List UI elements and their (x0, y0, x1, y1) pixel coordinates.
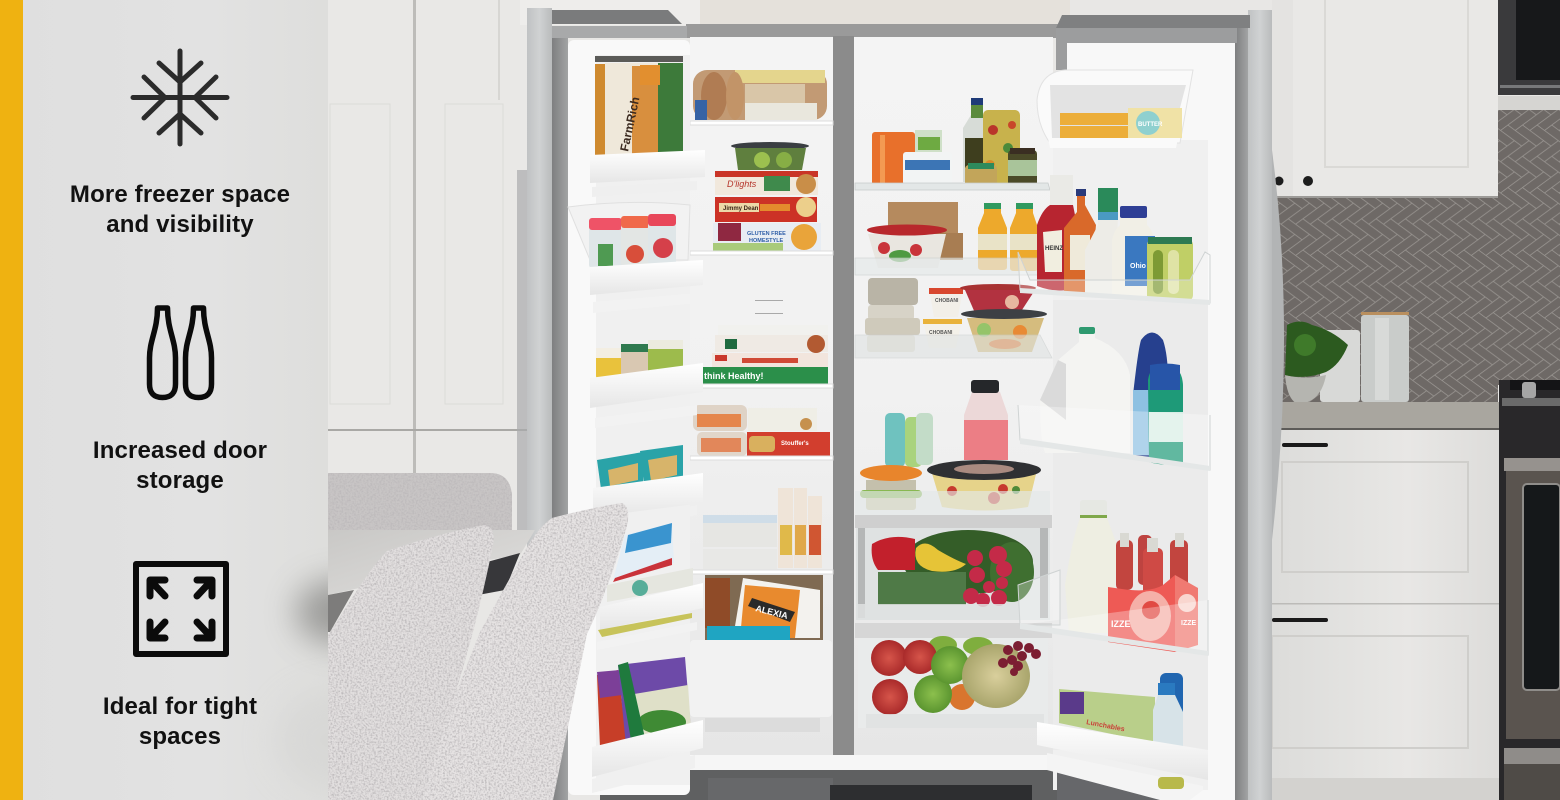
orange juice bottles (978, 203, 1038, 271)
frozen bags on door (607, 523, 693, 602)
freezer shelf 4 (690, 456, 833, 460)
vegetable bags (597, 657, 691, 748)
milk bottle (1065, 500, 1117, 633)
refrigerator cabinet (600, 24, 1060, 800)
dairy compartment (1037, 70, 1193, 148)
Izze carton: IZZE (1111, 619, 1130, 629)
freezer shelf 2 (690, 251, 833, 255)
right refrigerator door (1018, 10, 1284, 800)
icon: two bottles (150, 308, 212, 398)
back chair (328, 473, 512, 530)
radishes (963, 546, 1012, 607)
pasta bowl (927, 460, 1041, 510)
herringbone backsplash (1272, 198, 1498, 403)
gluten free box: GLUTEN FREE (747, 231, 786, 237)
gluten free box (713, 223, 821, 252)
counter canisters and plant (1285, 312, 1409, 403)
freezer drawer contents: ALEXIA (755, 603, 789, 621)
door shelf 6 (592, 720, 703, 777)
covered berry container (731, 142, 809, 170)
D'lights box (715, 171, 818, 195)
Farm Rich box: FarmRich (617, 96, 642, 153)
freezer shelf 3 (690, 384, 833, 388)
door shelf 4 (593, 473, 703, 517)
silver door edge (1248, 10, 1272, 800)
red bell pepper (872, 537, 915, 570)
door curve (1272, 150, 1284, 540)
dining table and chairs (328, 473, 628, 800)
D'lights box: D'lights (727, 179, 757, 189)
heading: door storage line 2: storage (136, 467, 224, 494)
door bottom shelf (1037, 722, 1208, 780)
mayonnaise jar: Ohio (1130, 263, 1146, 270)
cardboard takeout boxes (888, 202, 963, 260)
beige wall above fridge (700, 0, 1070, 30)
upper crisper drawer (855, 515, 1052, 620)
kids drink bottles (1153, 673, 1183, 752)
tall entree boxes (778, 488, 822, 568)
ketchup bottle (1037, 175, 1075, 291)
freezer shelf 5 (690, 570, 833, 574)
upper right cabinets (1272, 0, 1498, 198)
salad bowl (961, 309, 1047, 352)
stove (1499, 380, 1560, 800)
hinge (1056, 15, 1250, 28)
milk jug (1040, 327, 1130, 453)
creamer bottles (1133, 332, 1183, 464)
pasta jar (983, 110, 1020, 185)
fruit (871, 636, 1041, 715)
bread on freezer shelf 1 (693, 70, 827, 120)
left freezer door (517, 8, 705, 800)
strawberry container (960, 284, 1036, 313)
ketchup bottle: HEINZ (1045, 246, 1063, 252)
Jimmy Dean box (715, 197, 817, 222)
refrigerator compartment contents (855, 98, 1052, 728)
small jars (965, 148, 1037, 188)
Jimmy Dean box: Jimmy Dean (723, 206, 759, 212)
hinge (552, 10, 682, 24)
stacked food containers (860, 465, 922, 510)
heading: tight spaces line 2: spaces (139, 723, 221, 750)
freezer shelf 1 (690, 121, 833, 125)
caprese bowl (867, 224, 947, 268)
pizza boxes: think Healthy! (704, 371, 764, 381)
snack box: Lunchables (1086, 719, 1125, 733)
small jars on door (596, 340, 683, 380)
yogurt cups: CHOBANI (929, 330, 953, 336)
gluten free box: HOMESTYLE (749, 238, 784, 244)
door bottom lip (1047, 753, 1203, 800)
Izze carton (1108, 575, 1198, 652)
freezer drawer (690, 640, 832, 732)
center divider (833, 36, 854, 755)
table top (328, 530, 535, 595)
clear door bin 1 (1018, 252, 1210, 303)
yellow stripe (0, 0, 23, 800)
chicken nugget boxes (597, 445, 683, 489)
freezer compartment contents (690, 70, 833, 732)
side panel (0, 0, 328, 800)
pizza boxes (702, 325, 828, 384)
Farm Rich box (595, 56, 683, 155)
clear door bin 3 (1018, 570, 1208, 655)
base grille (600, 755, 1060, 800)
left wall cabinets (328, 0, 700, 535)
pickle jar (1147, 237, 1193, 301)
Izze carton: IZZE (1181, 620, 1196, 627)
silver door edge (527, 8, 552, 800)
door shelf 3 (590, 363, 703, 408)
front chair right (417, 503, 628, 800)
pink drink pitcher (964, 380, 1008, 460)
mayonnaise jar (1112, 206, 1155, 298)
icon: expand arrows in square (136, 564, 226, 654)
ranch dressing bottle (1085, 188, 1118, 297)
vent slots (755, 300, 783, 301)
door liner (568, 40, 690, 795)
white stacked boxes (703, 515, 777, 569)
heading: tight spaces: Ideal for tight (103, 693, 257, 720)
lower crisper drawer (855, 623, 1052, 728)
microwave (1498, 0, 1560, 110)
door shelf 2 (590, 260, 703, 295)
bread bags (693, 405, 747, 456)
lower cabinets (1272, 430, 1499, 800)
front chair left (328, 525, 494, 800)
door shelf 1 (590, 150, 705, 183)
heading: freezer space line 2: and visibility (106, 211, 254, 238)
heading: door storage: Increased door (93, 437, 267, 464)
orange dressing bottle (1064, 189, 1096, 294)
Stouffer's boxes (747, 408, 830, 456)
table leg (478, 553, 520, 595)
snack box (1059, 689, 1155, 743)
freezer drawer contents (705, 575, 823, 640)
heading: freezer space: More freezer space (70, 181, 290, 208)
fridge shelf 3 (855, 335, 1052, 358)
panel background (23, 0, 328, 800)
yogurt cups: CHOBANI (935, 298, 959, 304)
tall sauce bottle (963, 98, 987, 182)
door frame (552, 27, 568, 800)
kale greens (903, 530, 1034, 602)
door liner (1067, 43, 1235, 800)
teal water bottles (885, 413, 933, 467)
drink mix canisters (568, 202, 690, 268)
yogurt cups (923, 288, 963, 348)
greens box (878, 572, 966, 605)
glass shelf 4 (855, 491, 1050, 515)
icon: snowflake (133, 51, 227, 144)
carrots container (872, 130, 942, 185)
fridge shelf 2 (855, 258, 1050, 275)
yellow squash (915, 543, 966, 572)
door shelf 5 (600, 583, 703, 630)
yogurt tub (903, 152, 952, 185)
clear door bin 2 (1018, 405, 1210, 470)
egg cartons (865, 278, 920, 352)
dairy compartment: BUTTER (1138, 122, 1163, 128)
fridge shelf 1 (855, 183, 1050, 190)
soda four-pack (1108, 533, 1198, 652)
countertop (1280, 402, 1499, 429)
Stouffer's boxes: Stouffer's (781, 441, 809, 447)
